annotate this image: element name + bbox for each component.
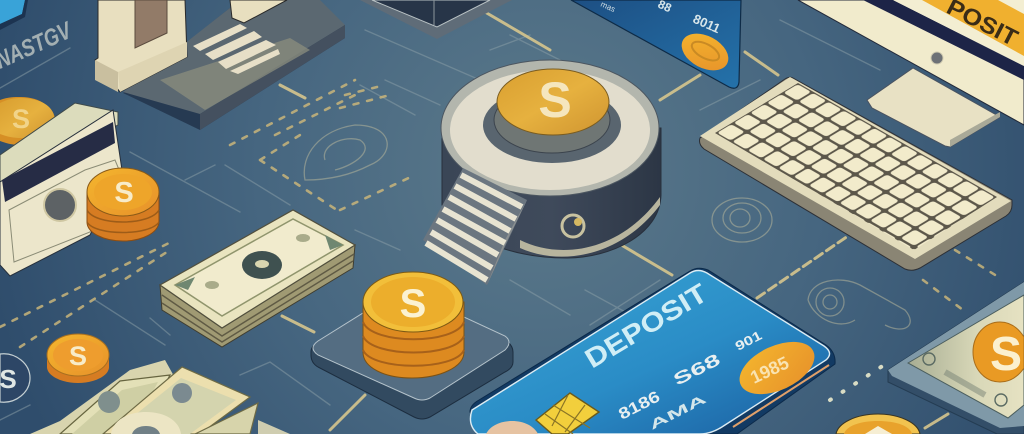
central coin vault machine xyxy=(423,60,661,285)
dotted link by tray xyxy=(830,365,884,400)
coin on vault xyxy=(497,69,609,135)
monitor stand xyxy=(867,68,1000,147)
banknote tray right xyxy=(888,282,1024,434)
coin on vault: S xyxy=(538,72,572,128)
coin socket xyxy=(483,87,621,163)
vault emblem xyxy=(562,215,584,237)
coin stack on tray xyxy=(311,272,513,419)
deposit credit card: AMA xyxy=(647,391,710,433)
coin behind wallet xyxy=(0,97,55,145)
coin stack on tray: S xyxy=(400,282,426,326)
top server box xyxy=(360,0,512,39)
deposit label on screen xyxy=(922,0,1024,56)
card figures: 8186 xyxy=(616,388,663,424)
bank building with steps xyxy=(95,0,345,130)
loose banknotes bottom left xyxy=(30,360,290,434)
swirl faint emblems xyxy=(304,125,910,329)
tray xyxy=(311,293,513,419)
EMV chip xyxy=(536,393,599,434)
deposit credit card: 901 xyxy=(733,328,764,354)
left edge round emblem xyxy=(0,354,30,402)
bottom gold coin xyxy=(836,414,920,434)
deposit credit card xyxy=(470,268,835,434)
staircase xyxy=(423,168,527,285)
desktop monitor xyxy=(798,0,1024,147)
entrance steps xyxy=(193,24,280,74)
coin behind wallet: S xyxy=(12,104,30,134)
stack of banknotes xyxy=(160,210,355,347)
gold coin on note: S xyxy=(990,328,1022,381)
card pill xyxy=(675,26,735,78)
small coin: S xyxy=(69,341,87,371)
wallet with cash and coin xyxy=(0,97,122,276)
orange pill: 1985 xyxy=(747,353,792,388)
key grid xyxy=(715,83,997,250)
keyboard xyxy=(700,77,1012,270)
orange pill xyxy=(731,331,823,405)
card number text: 8011 xyxy=(691,11,723,36)
deposit heading: DEPOSIT xyxy=(580,278,713,374)
fingertip xyxy=(486,421,538,434)
coin stack left xyxy=(87,168,159,241)
top credit card: mas xyxy=(599,0,617,14)
deposit credit card: S68 xyxy=(670,350,723,390)
small coin xyxy=(47,334,109,383)
gold coin on note xyxy=(973,322,1024,382)
coin stack left: S xyxy=(114,177,134,209)
top credit card xyxy=(571,0,741,88)
webcam xyxy=(931,52,943,64)
